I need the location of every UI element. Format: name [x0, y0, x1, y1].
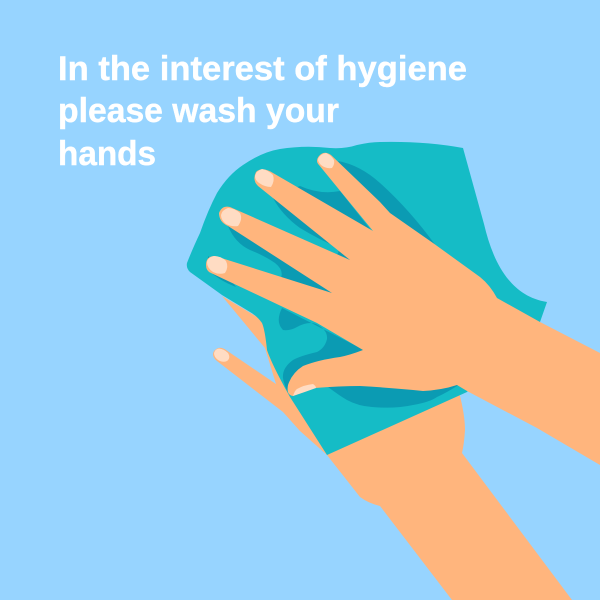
towel shadow: blob above thumb — [279, 308, 364, 392]
towel shadow: under top finger — [338, 161, 436, 250]
towel shadow: under ring finger — [228, 225, 345, 295]
lower hand and forearm — [213, 296, 572, 600]
towel shadow: between top fingers — [273, 186, 374, 262]
towel — [187, 142, 547, 455]
towel shadow: under little finger — [208, 256, 236, 287]
title: hands — [58, 135, 156, 173]
title — [58, 50, 467, 173]
icon: ring finger nail — [221, 208, 241, 226]
icon: little finger nail — [207, 256, 227, 274]
icon: middle finger nail — [255, 169, 274, 187]
icon: index finger nail — [318, 153, 334, 168]
title: please wash your — [58, 92, 339, 130]
upper hand and forearm — [206, 153, 600, 465]
icon: thumb nail — [293, 384, 316, 396]
towel shadow: below thumb — [328, 375, 460, 408]
title: In the interest of hygiene — [58, 50, 467, 88]
icon: lower hand fingernail — [214, 348, 229, 362]
